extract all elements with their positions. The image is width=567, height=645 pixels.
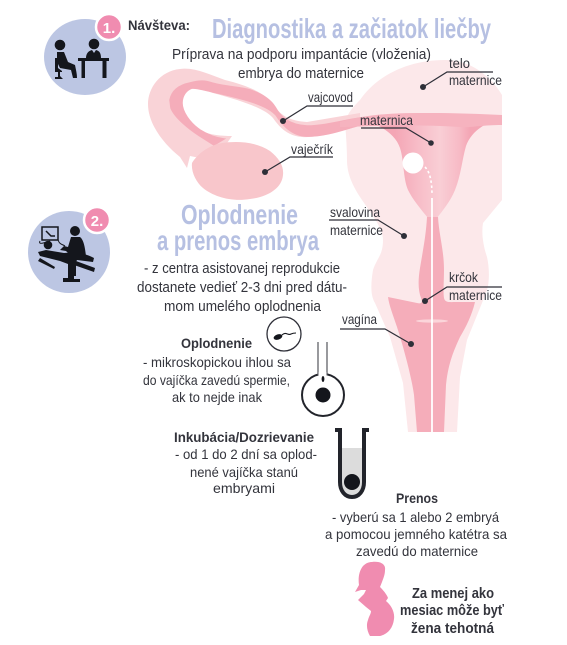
label lines and anatomy labels: maternice: [449, 72, 502, 88]
catheter: [431, 198, 433, 432]
text: transfer: Prenos: [396, 490, 438, 506]
intro text: Príprava na podporu impantácie (vloženia): [172, 46, 431, 63]
text: incubation: - od 1 do 2 dní sa oplod-: [175, 446, 317, 462]
ovary: [192, 142, 283, 200]
text: incubation: [174, 429, 317, 496]
text: fertilisation: ak to nejde inak: [172, 389, 263, 405]
label lines and anatomy labels: [262, 55, 502, 347]
icon: pregnant woman: [355, 562, 394, 636]
heading: fertilisation and embryo transfer: [157, 199, 319, 256]
embryo: [402, 152, 424, 174]
text: fertilisation: - mikroskopickou ihlou sa: [143, 354, 291, 370]
icon: embryo transfer procedure: [28, 207, 110, 293]
text: transfer: zavedú do maternice: [356, 543, 478, 559]
text: transfer: [325, 490, 507, 559]
heading: visit: Návšteva:: [128, 17, 190, 33]
callout: pregnancy: Za menej ako: [412, 585, 494, 602]
text: fertilisation: Oplodnenie: [181, 335, 252, 351]
cervical canal: [388, 217, 475, 432]
vagina highlight: [416, 319, 448, 323]
text: incubation: nené vajíčka stanú: [190, 464, 298, 480]
icon: sperm: [267, 317, 301, 351]
label lines and anatomy labels: telo: [449, 55, 470, 71]
uterine band: [340, 113, 502, 127]
text: timing: dostanete vedieť 2-3 dni pred dátu-: [137, 280, 347, 296]
label lines and anatomy labels: vajcovod: [308, 89, 353, 105]
text: timing: [137, 261, 347, 315]
label lines and anatomy labels: krčok: [449, 269, 479, 285]
text: incubation: Inkubácia/Dozrievanie: [174, 429, 314, 445]
fallopian tube outer: [148, 69, 360, 168]
icon: test tube: [335, 430, 369, 497]
uterine cavity: [370, 122, 490, 218]
label lines and anatomy labels: maternice: [330, 222, 383, 238]
heading: fertilisation and embryo transfer: Oplodnenie: [181, 199, 298, 230]
icon: egg and needle: [302, 342, 344, 416]
label lines and anatomy labels: maternica: [360, 112, 413, 128]
icon: visit consultation: [44, 14, 126, 95]
label lines and anatomy labels: svalovina: [330, 204, 380, 220]
label lines and anatomy labels: vagína: [342, 311, 377, 327]
callout: pregnancy: [400, 585, 505, 637]
text: transfer: - vyberú sa 1 alebo 2 embryá: [332, 509, 499, 525]
label lines and anatomy labels: maternice: [449, 287, 502, 303]
badge 1: 1.: [103, 20, 115, 37]
anatomy diagram: [148, 60, 502, 432]
catheter path: [425, 167, 432, 195]
callout: pregnancy: žena tehotná: [411, 620, 495, 637]
callout: pregnancy: mesiac môže byť: [400, 602, 505, 619]
uterus outer body: [345, 60, 502, 432]
intro text: [172, 46, 431, 82]
text: timing: mom umelého oplodnenia: [164, 299, 322, 315]
text: transfer: a pomocou jemného katétra sa: [325, 526, 507, 542]
badge 2: 2.: [91, 213, 103, 230]
text: fertilisation: [143, 335, 291, 405]
text: fertilisation: do vajíčka zavedú spermie,: [143, 372, 290, 388]
text: incubation: embryami: [213, 480, 275, 496]
heading: fertilisation and embryo transfer: a prenos embrya: [157, 225, 319, 256]
intro text: embrya do maternice: [238, 65, 364, 82]
text: timing: - z centra asistovanej reprodukcie: [144, 261, 340, 277]
fallopian tube inner: [170, 81, 360, 145]
label lines and anatomy labels: vaječrík: [291, 141, 334, 157]
